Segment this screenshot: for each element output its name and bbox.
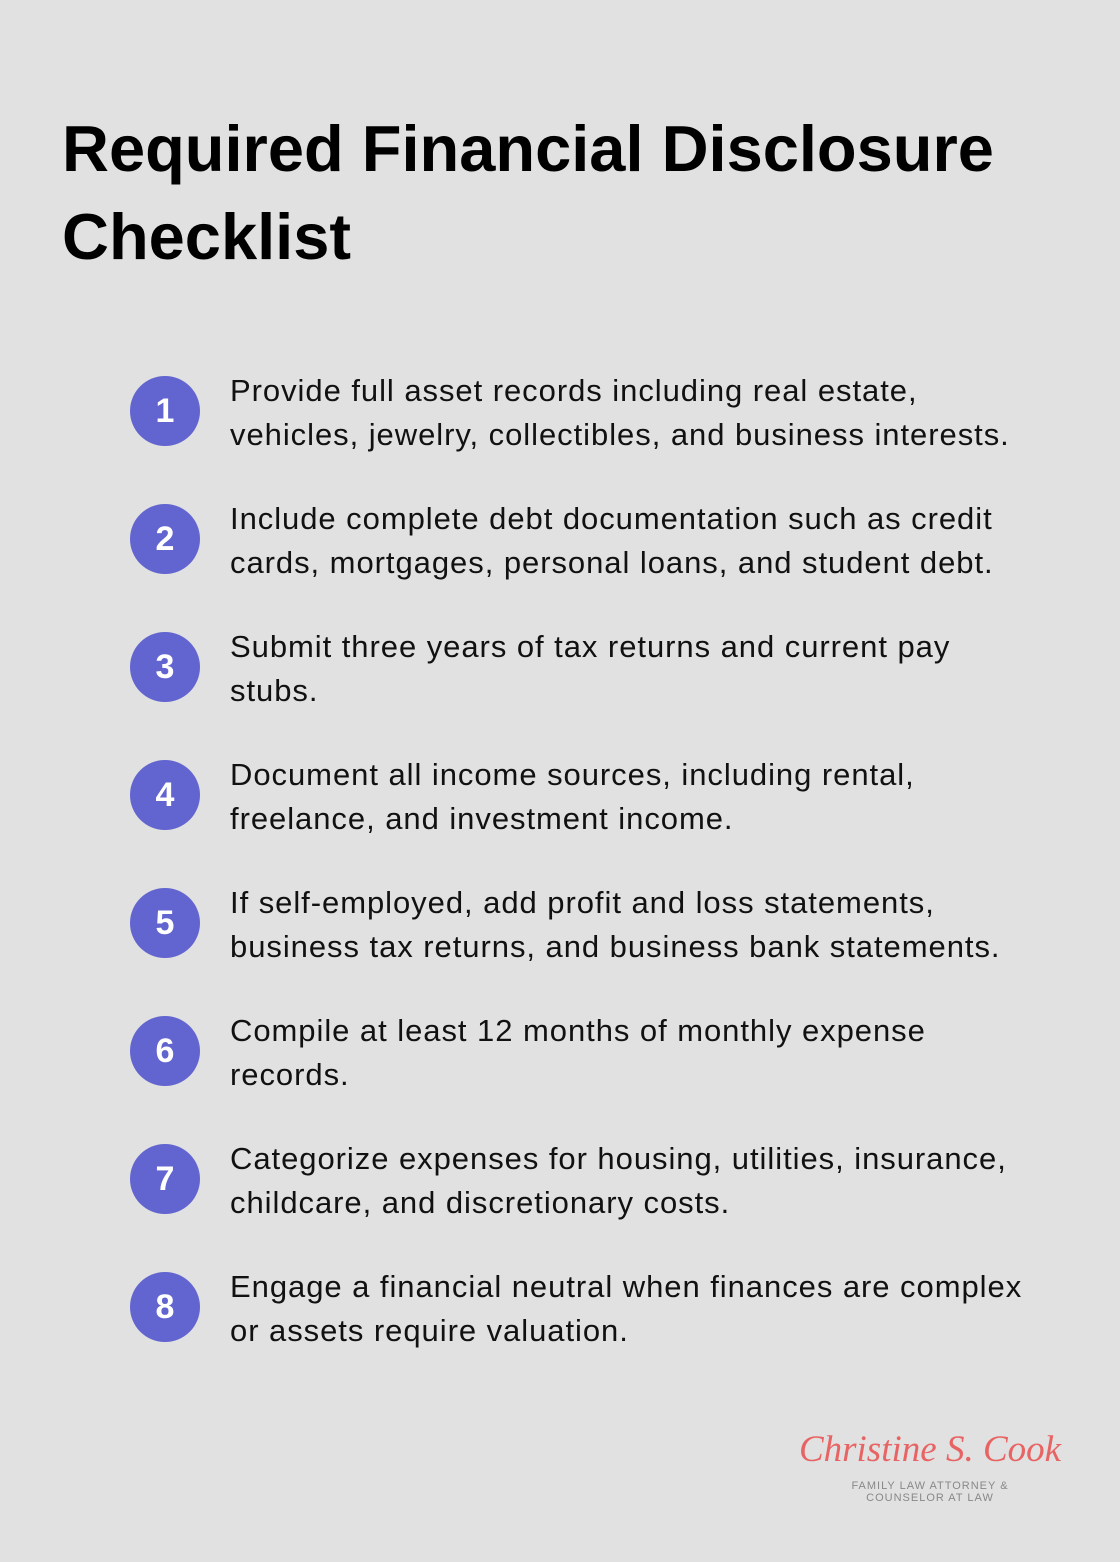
item 1: 1 [156,392,174,430]
item 1: vehicles, jewelry, collectibles, and business interests. [230,417,1010,452]
item 4: freelance, and investment income. [230,801,734,836]
item 4 [130,757,915,836]
item 8 [130,1269,1022,1348]
item 4: 4 [156,776,174,814]
item 5: business tax returns, and business bank statements. [230,929,1000,964]
item 2 [130,501,994,580]
item 8: or assets require valuation. [230,1313,629,1348]
item 8: Engage a financial neutral when finances are complex [230,1269,1022,1304]
item 1: Provide full asset records including real estate, [230,373,918,408]
item 2: 2 [156,520,174,558]
item 7 [130,1141,1007,1220]
item 6: 6 [156,1032,174,1070]
logo: FAMILY LAW ATTORNEY & [851,1480,1009,1492]
item 6 [130,1013,926,1092]
item 3: Submit three years of tax returns and current pay [230,629,950,664]
logo [799,1429,1062,1504]
item 6: Compile at least 12 months of monthly expense [230,1013,926,1048]
title: Required Financial Disclosure Checklist [62,112,994,273]
item 3: stubs. [230,673,318,708]
item 8: 8 [156,1288,174,1326]
item 2: Include complete debt documentation such as credit [230,501,993,536]
item 6: records. [230,1057,350,1092]
item 7: Categorize expenses for housing, utilities, insurance, [230,1141,1007,1176]
item 7: childcare, and discretionary costs. [230,1185,730,1220]
item 5 [130,885,1000,964]
logo: COUNSELOR AT LAW [866,1492,994,1504]
item 4: Document all income sources, including rental, [230,757,915,792]
item 7: 7 [156,1160,174,1198]
item 5: If self-employed, add profit and loss statements, [230,885,935,920]
item 2: cards, mortgages, personal loans, and student debt. [230,545,994,580]
logo: Christine S. Cook [799,1429,1061,1470]
item 3 [130,629,950,708]
item 1 [130,373,1010,452]
item 5: 5 [156,904,174,942]
item 3: 3 [156,648,174,686]
